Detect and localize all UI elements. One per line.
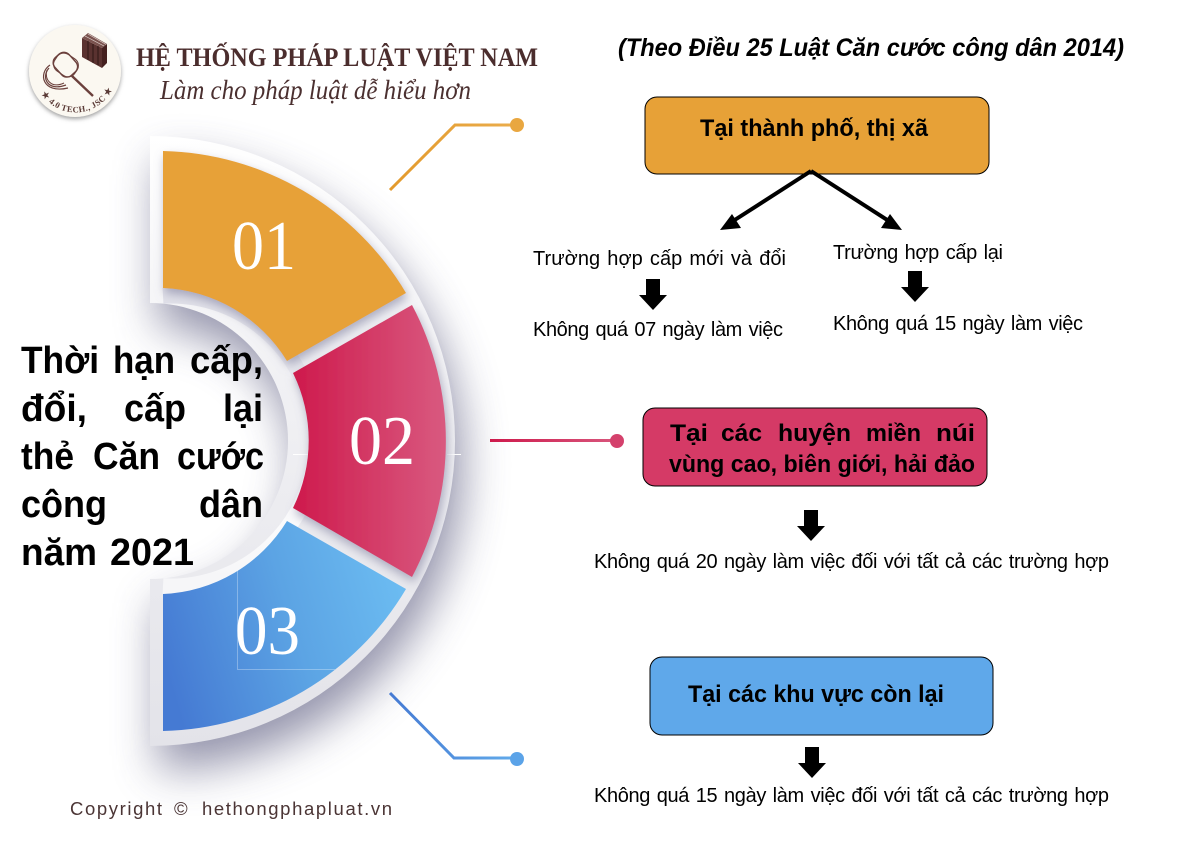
copyright: © [174,798,188,819]
header: tagline: Làm cho pháp luật dễ hiểu hơn [159,75,471,105]
connector: blue [390,693,524,766]
main title: thẻ [21,436,74,478]
arrow: down to 07 days [639,279,667,310]
panel: mountain district box: miền [866,420,921,447]
segment 03 [163,521,406,731]
main title: cước [177,436,264,478]
text: remaining areas 15 days: Không quá 15 ngày làm việc đối với tất cả các trường hợp [594,785,1109,807]
segment 02: 02 [349,403,415,480]
arrow: to reissue case [811,171,902,230]
main title: năm [21,532,97,574]
segment 01 [163,151,406,361]
panel: mountain district box [643,408,987,486]
panel: mountain district box: Tại [670,420,708,447]
panel: mountain district box: các [721,420,762,447]
header: organisation name: HỆ THỐNG PHÁP LUẬT VIỆT NAM [136,43,538,72]
logo: ★ 4.0 TECH., JSC ★ [42,88,112,112]
legal reference: (Theo Điều 25 Luật Căn cước công dân 2014) [618,34,1124,62]
panel: city box [645,97,989,174]
logo [26,24,124,122]
arrow: down to remaining areas 15 days [798,747,826,778]
panel: remaining areas box [650,657,993,735]
panel: mountain district box: huyện [778,420,851,447]
segment 02 [293,305,446,577]
arrow: to new and exchange case [720,171,811,230]
arrow: down to 20 days [797,510,825,541]
main title: Thời [21,340,99,382]
connector: pink [490,434,624,448]
text: new and exchange case: Trường hợp cấp mới và đổi [533,248,786,270]
text: reissue case: Trường hợp cấp lại [833,242,1003,264]
text: 07 days: Không quá 07 ngày làm việc [533,319,783,341]
semicircle diagram [150,136,463,770]
main title: 2021 [110,532,194,574]
main title: đổi, [21,388,87,430]
copyright [70,798,392,819]
main title: cấp [124,388,186,430]
main title: dân [199,484,263,526]
panel: mountain district box: núi [936,420,975,447]
connector: orange [390,118,524,190]
text: 15 days: Không quá 15 ngày làm việc [833,313,1083,335]
main title: hạn [113,340,175,382]
panel: remaining areas box: Tại các khu vực còn lại [688,681,944,708]
main title: lại [223,388,263,430]
text: 20 days: Không quá 20 ngày làm việc đối với tất cả các trường hợp [594,551,1109,573]
panel: mountain district box: vùng cao, biên giới, hải đảo [669,451,975,478]
panel: city box: Tại thành phố, thị xã [700,115,929,142]
main title: cấp, [190,340,263,382]
segment 03: 03 [235,593,300,670]
copyright: hethongphapluat.vn [202,798,392,819]
main title: công [21,484,107,526]
main title [21,340,264,574]
main title: Căn [93,436,160,478]
segment 01: 01 [232,208,296,285]
arrow: down to 15 days [901,271,929,302]
copyright: Copyright [70,798,162,819]
